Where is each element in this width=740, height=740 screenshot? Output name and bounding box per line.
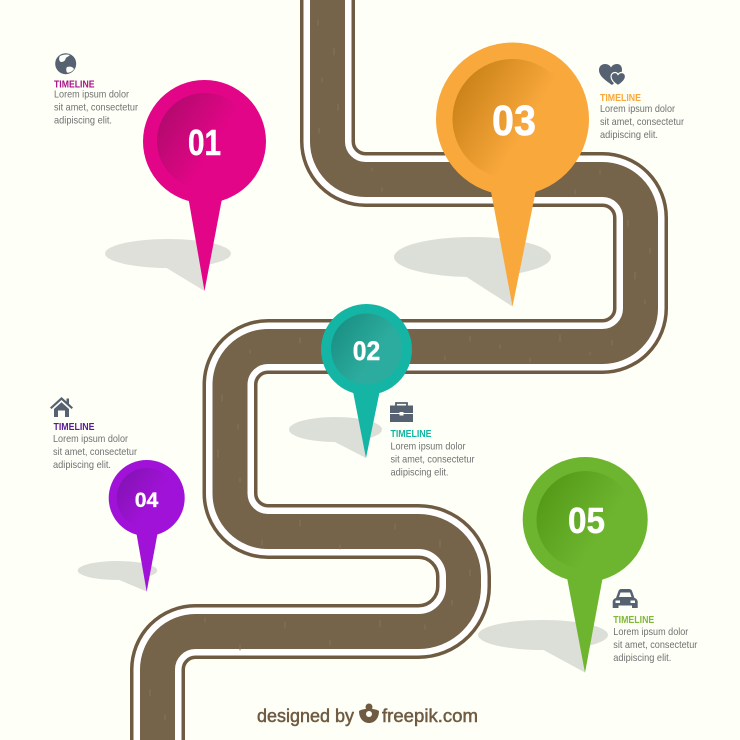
footer credit: designed by: [257, 706, 354, 726]
pin 02 shadow: [289, 417, 382, 458]
pin 04 group: [78, 460, 185, 592]
text block 02: sit amet, consectetur: [390, 454, 475, 466]
text block 05: sit amet, consectetur: [613, 639, 698, 651]
text block 03: TIMELINE: [600, 92, 641, 104]
text block 05: TIMELINE: [613, 614, 654, 626]
icon: freepik logo: [359, 704, 379, 723]
pin 04 shadow: [78, 561, 157, 592]
pin 02 inner circle: [331, 314, 402, 384]
icon: globe: [55, 53, 76, 74]
text block 02: TIMELINE: [390, 428, 432, 440]
pin 05 group: [478, 457, 648, 673]
text block 04: Lorem ipsum dolor: [53, 433, 128, 445]
footer credit: [257, 704, 478, 726]
pin 02 group: [289, 304, 412, 458]
text block 04: adipiscing elit.: [53, 459, 111, 471]
text block 02: adipiscing elit.: [390, 466, 448, 478]
pin 05 number: 05: [568, 500, 605, 541]
icon: house: [50, 397, 73, 417]
text block 03: adipiscing elit.: [600, 129, 658, 141]
text block 01: TIMELINE: [54, 78, 94, 90]
pin 01 marker: [143, 80, 266, 291]
text block 05: [613, 614, 698, 664]
text block 03: sit amet, consectetur: [600, 116, 684, 128]
pin 02 number: 02: [353, 336, 380, 366]
text block 02: [390, 428, 475, 478]
text block 03: Lorem ipsum dolor: [600, 103, 675, 115]
icon: car: [613, 589, 638, 608]
text block 04: [53, 421, 137, 471]
pin 03 group: [394, 42, 589, 306]
text block 05: Lorem ipsum dolor: [613, 626, 689, 638]
pin 01 shadow: [105, 239, 231, 291]
pin 03 shadow: [394, 237, 551, 306]
pin 03 inner circle: [452, 59, 572, 179]
icon: briefcase: [390, 403, 413, 422]
text block 01: [54, 78, 138, 126]
pin 03 number: 03: [492, 97, 536, 145]
pin 04 inner circle: [117, 468, 177, 528]
text block 04: TIMELINE: [54, 421, 94, 433]
text block 03: [600, 92, 684, 141]
winding road: [150, 0, 650, 740]
pin 01 inner circle: [157, 93, 253, 189]
pin 01 group: [105, 80, 266, 291]
text block 02: Lorem ipsum dolor: [390, 440, 466, 452]
pin 04 number: 04: [135, 489, 159, 512]
pin 05 marker: [523, 457, 648, 673]
text block 01: Lorem ipsum dolor: [54, 88, 129, 100]
pin 04 marker: [109, 460, 185, 592]
text block 04: sit amet, consectetur: [53, 446, 137, 458]
pin 05 inner circle: [536, 471, 634, 569]
pin 02 marker: [321, 304, 412, 458]
text block 05: adipiscing elit.: [613, 652, 671, 664]
pin 01 number: 01: [188, 122, 221, 163]
pin 03 marker: [436, 42, 589, 306]
text block 01: adipiscing elit.: [54, 114, 112, 126]
text block 01: sit amet, consectetur: [54, 102, 138, 114]
icon: hearts: [599, 64, 626, 86]
footer credit: freepik.com: [382, 706, 478, 726]
pin 05 shadow: [478, 620, 608, 672]
